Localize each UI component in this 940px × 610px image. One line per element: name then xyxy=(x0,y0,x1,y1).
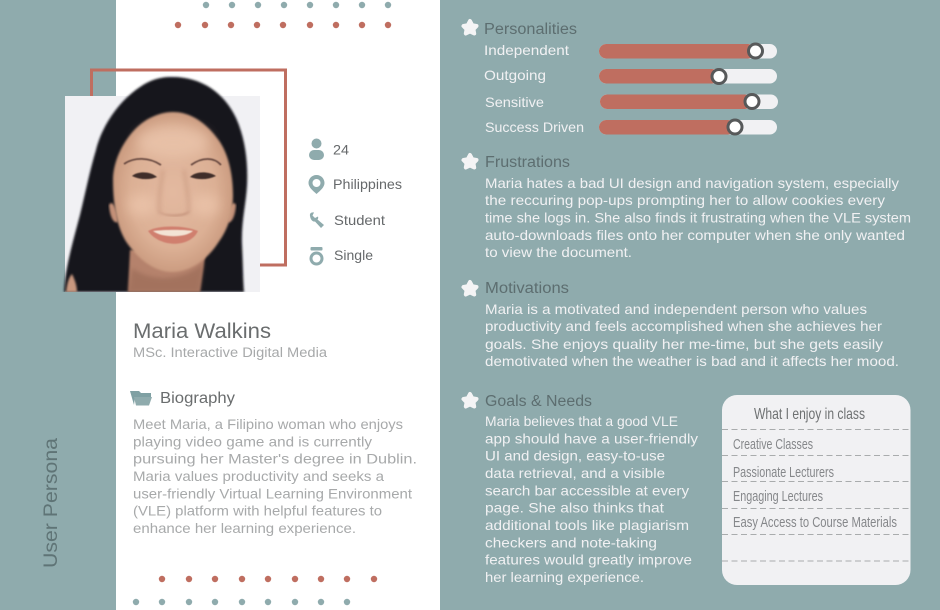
heading: Frustrations xyxy=(485,154,570,171)
body text: goals. She enjoys quality her me-time, but she gets easily xyxy=(485,336,883,352)
country: Philippines xyxy=(333,176,402,192)
trait: success driven xyxy=(485,119,777,135)
body text: to view the document. xyxy=(485,244,632,260)
body text: features would greatly improve xyxy=(485,552,692,568)
icon: location pin xyxy=(308,175,324,194)
card items xyxy=(733,436,897,531)
panel: frustrations xyxy=(464,154,911,260)
card items: Creative Classes xyxy=(733,436,813,453)
icon: star xyxy=(464,155,476,168)
trait: independent: Independent xyxy=(484,42,569,58)
body text: the reccuring pop-ups prompting her to allow cookies every xyxy=(485,192,885,208)
body text: UI and design, easy-to-use xyxy=(485,448,665,464)
body text: her learning experience. xyxy=(485,569,644,585)
body text: data retrieval, and a visible xyxy=(485,465,665,481)
body text: search bar accessible at every xyxy=(485,482,689,498)
body text xyxy=(485,175,911,260)
trait: outgoing xyxy=(484,67,777,84)
heading: Motivations xyxy=(485,280,569,297)
note card: what I enjoy in class xyxy=(722,395,910,585)
biography text: (VLE) platform with helpful features to xyxy=(133,503,382,519)
body text: app should have a user-friendly xyxy=(485,430,698,446)
trait: outgoing: Outgoing xyxy=(484,67,546,83)
trait: sensitive: Sensitive xyxy=(485,94,544,110)
trait: independent xyxy=(484,42,777,58)
panel: goals and needs xyxy=(464,393,698,585)
body text: Maria hates a bad UI design and navigation system, especially xyxy=(485,175,899,191)
attributes list xyxy=(308,138,402,264)
degree: MSc. Interactive Digital Media xyxy=(133,345,328,360)
biography text: pursuing her Master's degree in Dublin. xyxy=(133,451,417,467)
biography heading: Biography xyxy=(160,390,235,407)
body text: checkers and note-taking xyxy=(485,534,657,550)
trait: sensitive xyxy=(485,94,778,110)
decorative dots: top xyxy=(175,2,391,28)
panel: personalities xyxy=(464,21,778,135)
card items: Engaging Lectures xyxy=(733,488,823,505)
body text: demotivated when the weather is bad and it affects her mood. xyxy=(485,353,899,369)
icon: folder xyxy=(130,391,152,406)
heading: Personalities xyxy=(484,21,577,38)
icon: star xyxy=(464,282,476,294)
icon: ring xyxy=(310,247,322,264)
biography text: Maria values productivity and seeks a xyxy=(133,468,384,484)
age: 24 xyxy=(333,142,349,158)
portrait frame xyxy=(92,70,286,265)
trait: success driven: Success Driven xyxy=(485,119,584,135)
body text: auto-downloads files onto her computer when she only wanted xyxy=(485,227,905,243)
biography text: playing video game and is currently xyxy=(133,433,372,449)
body text: additional tools like plagiarism xyxy=(485,517,689,533)
vertical label: User Persona: User Persona xyxy=(41,438,62,568)
body text: productivity and feels accomplished when she achieves her xyxy=(485,318,882,334)
relationship status: Single xyxy=(334,247,373,263)
icon: star xyxy=(464,394,476,406)
name: Maria Walkins xyxy=(133,320,271,343)
body text: page. She also thinks that xyxy=(485,500,664,516)
body text: time she logs in. She also finds it frustrating when the VLE system xyxy=(485,210,911,226)
biography text: user-friendly Virtual Learning Environment xyxy=(133,485,412,501)
portrait of Maria xyxy=(64,70,286,292)
portrait backdrop xyxy=(65,96,260,292)
body text xyxy=(485,413,698,585)
card items: Passionate Lecturers xyxy=(733,464,834,481)
portrait figure xyxy=(64,77,247,292)
card title: What I enjoy in class xyxy=(754,406,865,423)
icon: wrench xyxy=(310,212,324,228)
panel: profile xyxy=(116,0,440,610)
body text: Maria believes that a good VLE xyxy=(485,413,678,429)
biography text: enhance her learning experience. xyxy=(133,520,356,536)
occupation: Student xyxy=(334,212,385,228)
icon: star xyxy=(464,21,476,34)
icon: person xyxy=(309,138,324,160)
panel: motivations xyxy=(464,280,899,369)
biography text: Meet Maria, a Filipino woman who enjoys xyxy=(133,416,403,432)
decorative dots: bottom xyxy=(133,576,377,605)
body text: Maria is a motivated and independent person who values xyxy=(485,301,867,317)
biography text xyxy=(133,416,417,536)
body text xyxy=(485,301,899,369)
heading: Goals & Needs xyxy=(485,393,592,410)
